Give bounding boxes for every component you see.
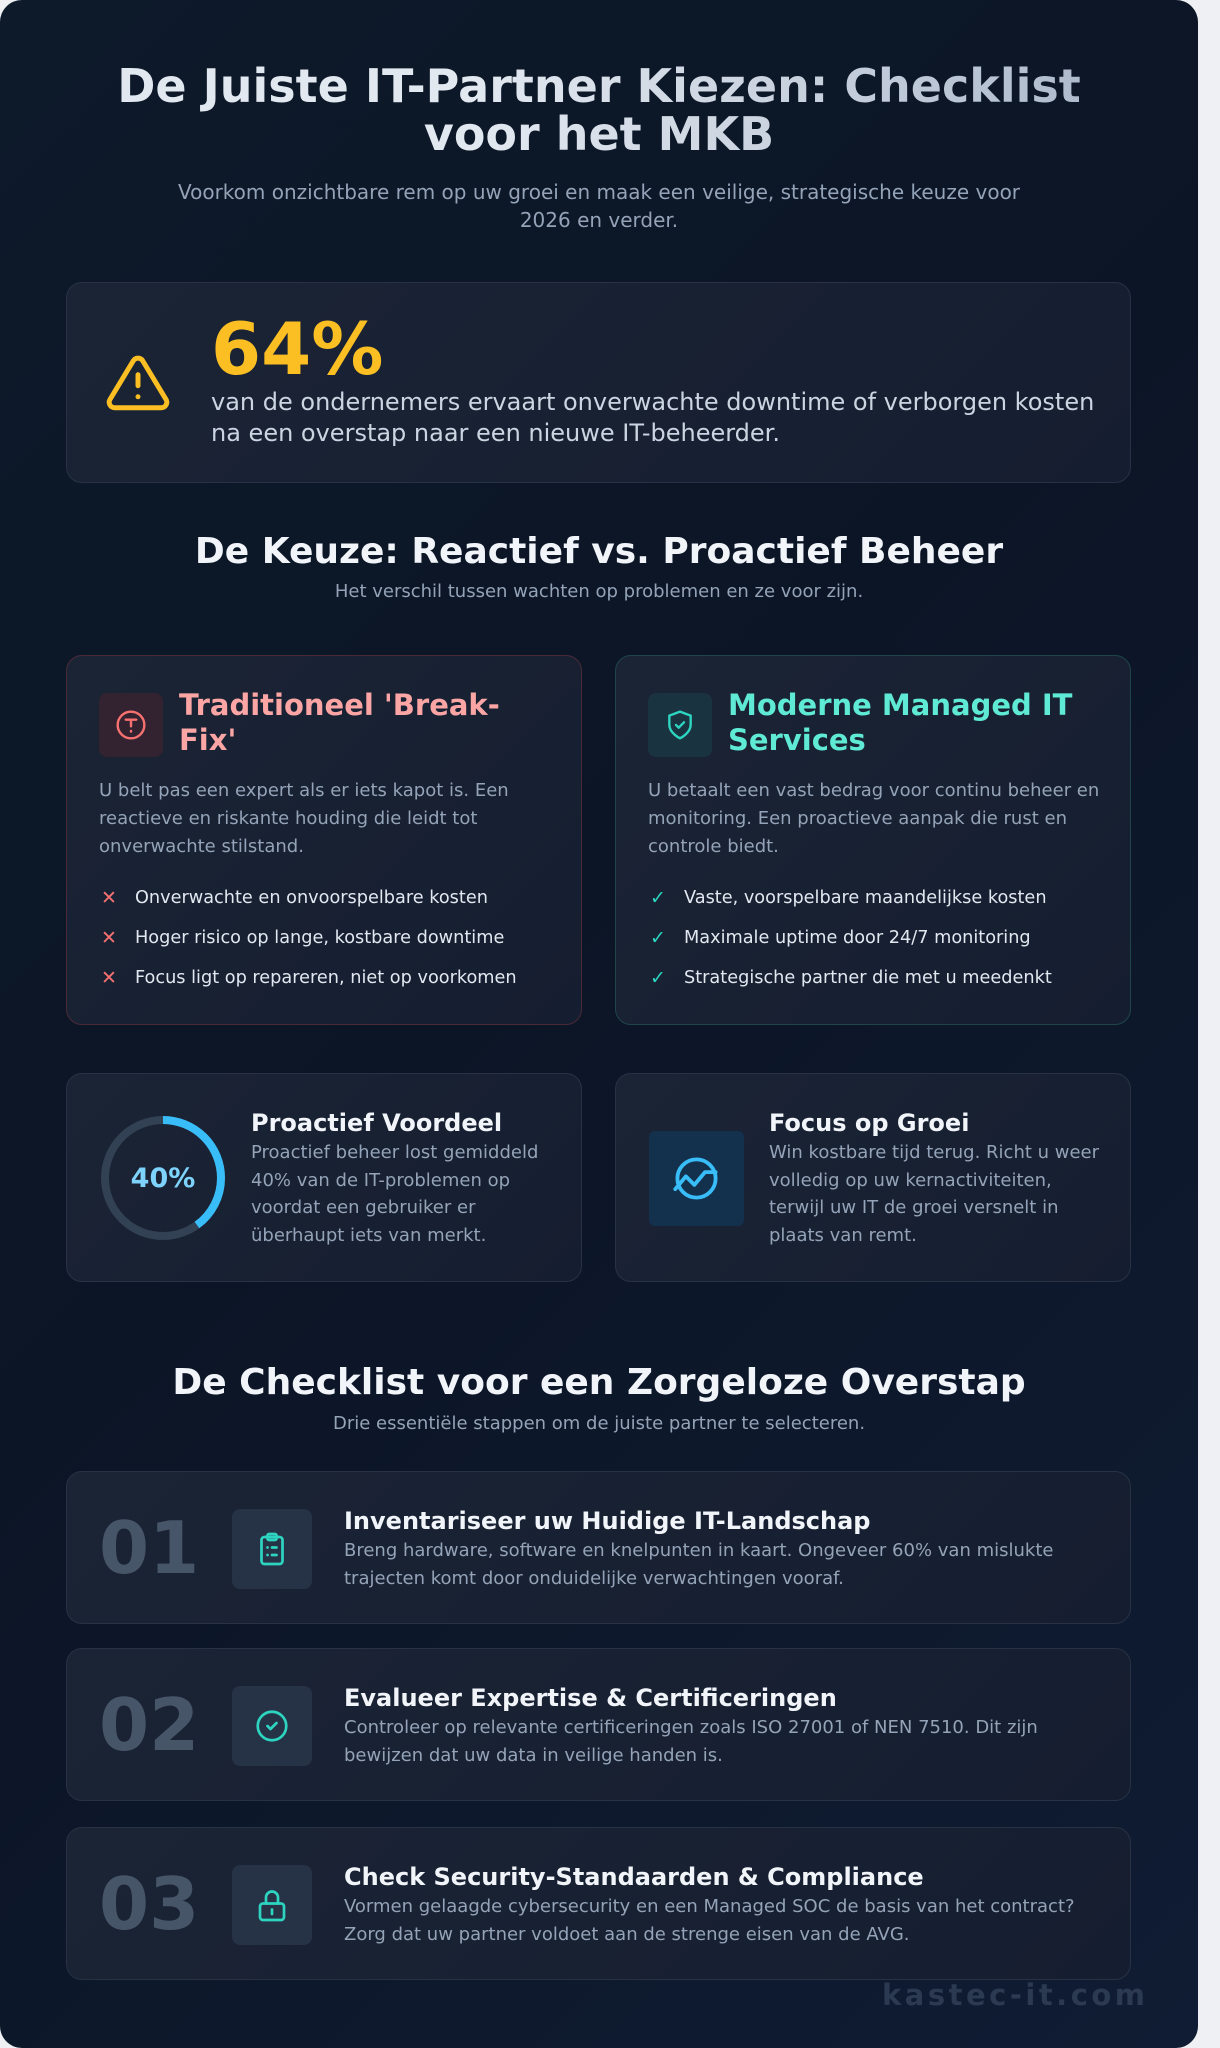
panel: proactief voordeel (66, 1073, 582, 1282)
text: Proactief beheer lost gemiddeld 40% van de IT-problemen op voordat een gebruiker er überhaupt iets van merkt. (251, 1142, 538, 1246)
panel: stat 64% (66, 282, 1131, 483)
icon: lock (232, 1865, 312, 1945)
panel: managed IT (615, 655, 1131, 1025)
list: cons: ✕ (101, 967, 117, 989)
footer brand: kastec-it.com (882, 1978, 1149, 2012)
step 01 (66, 1471, 1131, 1624)
stat number: 64% (211, 307, 383, 391)
step title: Inventariseer uw Huidige IT-Landschap (344, 1507, 870, 1535)
subtitle: Voorkom onzichtbare rem op uw groei en maak een veilige, strategische keuze voor 2026 en verder. (178, 180, 1020, 232)
card title: Traditioneel 'Break-Fix' (179, 688, 500, 757)
icon: alert (99, 693, 163, 757)
title: Focus op Groei (769, 1109, 969, 1137)
list: pros: ✓ (650, 927, 666, 949)
card description: U belt pas een expert als er iets kapot is. Een reactieve en riskante houding die leidt tot onverwachte stilstand. (99, 780, 509, 857)
step 02 (66, 1648, 1131, 1801)
list: cons: ✕ (101, 887, 117, 909)
list: pros: ✓ (650, 887, 666, 909)
heading: checklist: De Checklist voor een Zorgeloze Overstap (172, 1362, 1026, 1403)
card title: Moderne Managed IT Services (728, 688, 1072, 757)
list: cons: Hoger risico op lange, kostbare downtime (135, 928, 504, 948)
list: pros: Maximale uptime door 24/7 monitoring (684, 928, 1031, 948)
list: cons: Focus ligt op repareren, niet op voorkomen (135, 968, 517, 988)
list: cons (101, 887, 517, 989)
list: cons: Onverwachte en onvoorspelbare kosten (135, 888, 488, 908)
chart: 40% ring (101, 1116, 225, 1240)
step text: Controleer op relevante certificeringen zoals ISO 27001 of NEN 7510. Dit zijn bewijzen dat uw data in veilige handen is. (344, 1717, 1038, 1766)
title: Proactief Voordeel (251, 1109, 502, 1137)
title: De Juiste IT-Partner Kiezen: Checklist (117, 59, 1081, 113)
list: pros: Strategische partner die met u meedenkt (684, 968, 1052, 988)
step text: Vormen gelaagde cybersecurity en een Managed SOC de basis van het contract? Zorg dat uw partner voldoet aan de strenge eisen van de AVG. (344, 1896, 1075, 1945)
panel: focus op groei (615, 1073, 1131, 1282)
icon: growth (649, 1131, 744, 1226)
list: pros: ✓ (650, 967, 666, 989)
list: pros: Vaste, voorspelbare maandelijkse kosten (684, 888, 1047, 908)
chart: 40% ring: 40% (131, 1163, 195, 1194)
list: cons: ✕ (101, 927, 117, 949)
step text: Breng hardware, software en knelpunten in kaart. Ongeveer 60% van mislukte trajecten komt door onduidelijke verwachtingen vooraf. (344, 1540, 1053, 1589)
title: voor het MKB (424, 107, 774, 161)
heading: comparison: De Keuze: Reactief vs. Proactief Beheer (195, 531, 1003, 572)
number: 03 (99, 1862, 199, 1946)
icon: warning (106, 356, 170, 410)
step 03 (66, 1827, 1131, 1980)
panel: break-fix (66, 655, 582, 1025)
icon: check circle (232, 1686, 312, 1766)
icon: clipboard (232, 1509, 312, 1589)
card description: U betaalt een vast bedrag voor continu beheer en monitoring. Een proactieve aanpak die rust en controle biedt. (648, 780, 1099, 857)
sub heading: Drie essentiële stappen om de juiste partner te selecteren. (333, 1413, 865, 1434)
text: Win kostbare tijd terug. Richt u weer volledig op uw kernactiviteiten, terwijl uw IT de groei versnelt in plaats van remt. (769, 1142, 1099, 1246)
stat text: van de ondernemers ervaart onverwachte downtime of verborgen kosten na een overstap naar een nieuwe IT-beheerder. (211, 388, 1094, 447)
step title: Evalueer Expertise & Certificeringen (344, 1684, 837, 1712)
step title: Check Security-Standaarden & Compliance (344, 1863, 924, 1891)
number: 02 (99, 1683, 199, 1767)
number: 01 (99, 1506, 199, 1590)
list: pros (650, 887, 1052, 989)
title (0, 62, 1198, 158)
sub heading: Het verschil tussen wachten op problemen en ze voor zijn. (335, 581, 863, 602)
icon: shield (648, 693, 712, 757)
